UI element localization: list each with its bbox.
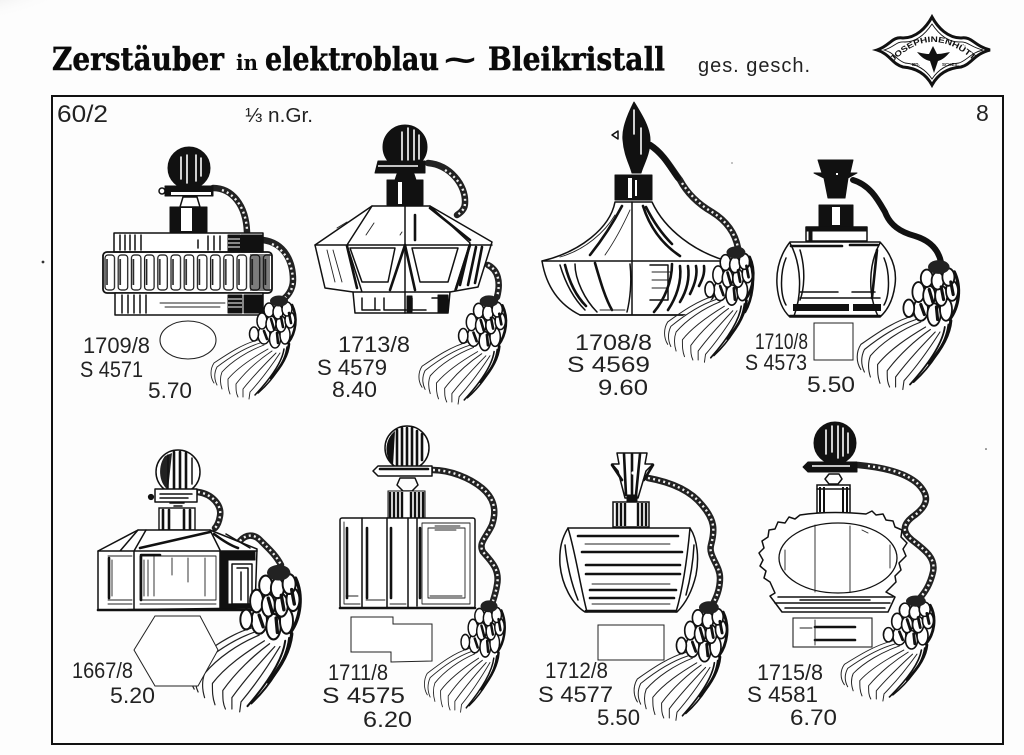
labels: [567, 330, 652, 400]
atomizer hose: [853, 180, 941, 262]
labels: 1711/8: [328, 660, 388, 685]
stopper ball: [385, 426, 429, 470]
labels: 5.20: [110, 683, 155, 708]
body: [542, 202, 727, 315]
labels: S 4575: [322, 683, 405, 708]
neck: [615, 175, 652, 200]
body: [103, 233, 272, 315]
labels: 1667/8: [72, 658, 133, 683]
labels: [80, 333, 192, 403]
stopper: [814, 160, 857, 198]
stopper ball: [156, 450, 200, 494]
labels: 5.50: [807, 372, 855, 397]
base outline: hexagon: [134, 616, 218, 686]
base outline: rectangle: [598, 625, 664, 660]
body: [560, 528, 698, 612]
labels: 6.70: [790, 705, 837, 730]
print specks: [42, 162, 987, 450]
atomizer hose: [198, 492, 281, 565]
stopper: [612, 453, 653, 501]
collar and neck: [375, 161, 425, 205]
tassel: [424, 600, 505, 712]
labels: S 4569: [567, 352, 650, 377]
neck and shoulder: [806, 205, 867, 241]
collar and neck: [373, 466, 432, 518]
labels: S 4571: [80, 357, 143, 382]
faceted body: [315, 206, 492, 313]
body: [340, 518, 475, 608]
labels: S 4581: [747, 682, 818, 707]
labels: 6.20: [363, 707, 412, 732]
atomizer hose: [213, 188, 293, 300]
tassel: [665, 246, 753, 362]
labels: 1712/8: [545, 658, 608, 683]
labels: [538, 658, 640, 730]
body: [98, 530, 257, 610]
labels: [322, 660, 412, 732]
title: in: [236, 50, 258, 75]
bottle 1715/8: [747, 422, 934, 730]
labels: 1709/8: [83, 333, 150, 358]
bottle 1711/8: [322, 426, 505, 732]
labels: [317, 332, 410, 402]
labels: 8.40: [332, 377, 377, 402]
stopper ball: [168, 147, 210, 189]
base outline: label with cut: [793, 618, 872, 647]
base outline: oval: [160, 321, 216, 359]
atomizer hose: [650, 145, 738, 248]
labels: 5.70: [148, 378, 192, 403]
title: Zerstäuber: [52, 40, 225, 78]
base outline: stepped label: [351, 617, 432, 662]
labels: 9.60: [598, 375, 648, 400]
labels: 5.50: [597, 705, 640, 730]
tassel: [190, 565, 300, 712]
labels: 1713/8: [338, 332, 410, 357]
pointed stopper: [612, 102, 650, 173]
tassel: [857, 260, 959, 390]
labels: S 4573: [745, 350, 807, 375]
collar and neck: [148, 489, 197, 530]
labels: S 4579: [317, 355, 387, 380]
labels: 1708/8: [575, 330, 652, 355]
bottle 1712/8: [538, 453, 727, 730]
atomizer hose: [648, 478, 720, 606]
base outline: square: [814, 323, 853, 360]
tassel: [419, 295, 506, 404]
scale note: ⅓ n.Gr.: [245, 105, 313, 127]
labels: 1710/8: [755, 329, 808, 354]
page ref: 60/2: 60/2: [57, 101, 108, 128]
atomizer hose: [428, 163, 499, 297]
tassel: [841, 595, 934, 701]
labels: S 4577: [538, 682, 613, 707]
catalogue frame: [52, 96, 1003, 744]
labels: [747, 660, 837, 730]
tassel: [211, 296, 295, 399]
labels: [745, 329, 855, 397]
bottle 1708/8: [542, 102, 753, 400]
neck: [613, 502, 649, 527]
collar and neck: [159, 186, 213, 232]
bottle 1667/8: [72, 450, 300, 712]
tassel: [634, 601, 727, 720]
logo: Josephinenhütte: SCHES.: [942, 62, 959, 67]
page number: 8: [976, 100, 989, 126]
collar and neck: [803, 462, 857, 513]
logo: Josephinenhütte: BD.: [912, 62, 920, 67]
title: Bleikristall: [488, 40, 665, 78]
bottle 1713/8: [315, 125, 506, 404]
subtitle: ges. gesch.: ges. gesch.: [698, 55, 810, 77]
title: ~: [441, 40, 479, 78]
atomizer hose: [433, 470, 498, 604]
scalloped body: [759, 511, 907, 612]
title: elektroblau: [265, 40, 439, 78]
stopper ball: [814, 422, 856, 464]
bottle 1710/8: [745, 160, 959, 397]
title: [52, 40, 665, 78]
labels: 1715/8: [757, 660, 823, 685]
bottle 1709/8: [80, 147, 295, 403]
labels: [72, 658, 155, 708]
logo: Josephinenhütte: [872, 14, 990, 88]
body: [777, 242, 895, 317]
atomizer hose: [858, 465, 933, 598]
stopper ball: [383, 125, 427, 169]
